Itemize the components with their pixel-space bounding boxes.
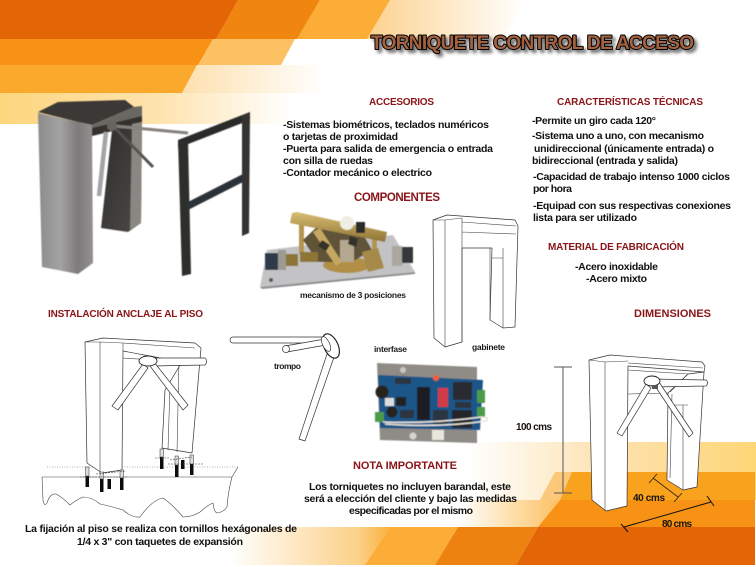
drawing: torniquete con dimensiones	[589, 355, 707, 511]
drawing: gabinete	[433, 215, 518, 347]
label: mecanismo de 3 posiciones: mecanismo de 3 posiciones	[300, 290, 406, 300]
heading: componentes: COMPONENTES	[354, 192, 440, 204]
dimension: 80 cms: 80 cms	[662, 519, 692, 530]
dimension: 100 cms: 100 cms	[516, 422, 552, 433]
text block: características list: -Sistema uno a uno, con mecanismo	[532, 130, 704, 142]
turnstile body	[85, 338, 207, 473]
heading: características técnicas: CARACTERÍSTICAS TÉCNICAS	[557, 95, 703, 108]
dimension: 100 cms	[516, 367, 572, 493]
text block: accesorios list: o tarjetas de proximidad	[283, 131, 398, 143]
floor slab with wavy edge	[42, 467, 238, 517]
text block: características list: por hora	[533, 183, 572, 195]
text block: características list: lista para ser utilizado	[533, 212, 637, 224]
drawing: trompo	[230, 331, 343, 441]
dimension: 80 cms	[621, 496, 714, 532]
label: gabinete: gabinete	[472, 342, 505, 352]
text block: características list: unidireccional (únicamente entrada) o	[534, 143, 714, 155]
heading: nota importante: NOTA IMPORTANTE	[353, 460, 457, 472]
heading: accesorios: ACCESORIOS	[369, 97, 434, 108]
text block: características list: -Permite un giro cada 120°	[532, 115, 656, 127]
text block: accesorios list: -Puerta para salida de emergencia o entrada	[283, 143, 493, 155]
dimension: 40 cms	[633, 474, 682, 504]
label: trompo: trompo	[274, 361, 301, 371]
section: características técnicas	[532, 95, 731, 224]
text block: nota: especificadas por el mismo	[349, 505, 473, 517]
text block: fijación al piso: 1/4 x 3" con taquetes de expansión	[77, 536, 243, 548]
photo: tarjeta interfase	[375, 363, 487, 443]
dotted floor line	[47, 466, 238, 468]
drawing: instalación con anclaje al piso	[42, 338, 238, 517]
text block: nota	[304, 481, 517, 517]
text block: fijación al piso	[25, 523, 297, 548]
text block: accesorios list: -Sistemas biométricos, teclados numéricos	[283, 119, 489, 131]
text block: características list: bidireccional (entrada y salida)	[532, 155, 678, 167]
section: nota importante	[304, 460, 517, 517]
text block: accesorios list: -Contador mecánico o electrico	[283, 167, 432, 179]
dimension: 40 cms: 40 cms	[633, 493, 665, 504]
heading: material: MATERIAL DE FABRICACIÓN	[548, 240, 684, 253]
floor anchor bolts	[80, 449, 203, 492]
text block: accesorios list: con silla de ruedas	[283, 155, 373, 167]
heading: instalación anclaje al piso: INSTALACIÓN ANCLAJE AL PISO	[48, 307, 203, 320]
text block: características list: -Capacidad de trabajo intenso 1000 ciclos	[533, 171, 730, 183]
background: top orange bands	[0, 0, 525, 124]
text block: materiales: -Acero inoxidable	[575, 261, 658, 273]
label: interfase: interfase	[374, 344, 407, 354]
photo: mecanismo de 3 posiciones	[260, 212, 415, 289]
section: material de fabricación	[548, 240, 684, 285]
heading: dimensiones: DIMENSIONES	[634, 308, 711, 320]
text block: nota: será a elección del cliente y bajo las medidas	[304, 493, 517, 505]
text block: características list: -Equipad con sus respectivas conexiones	[533, 200, 731, 212]
photo: stainless steel turnstile with barandal	[38, 100, 250, 276]
text block: materiales: -Acero mixto	[586, 273, 647, 285]
text block: fijación al piso: La fijación al piso se realiza con tornillos hexágonales de	[25, 523, 297, 535]
background: bottom orange bands	[230, 442, 756, 565]
text block: nota: Los torniquetes no incluyen barandal, este	[309, 481, 511, 493]
text block: accesorios list	[283, 119, 493, 179]
text block: materiales	[575, 261, 658, 285]
section: accesorios	[283, 97, 493, 179]
text block: características list	[532, 115, 731, 224]
title: TORNIQUETE CONTROL DE ACCESO	[371, 33, 694, 54]
